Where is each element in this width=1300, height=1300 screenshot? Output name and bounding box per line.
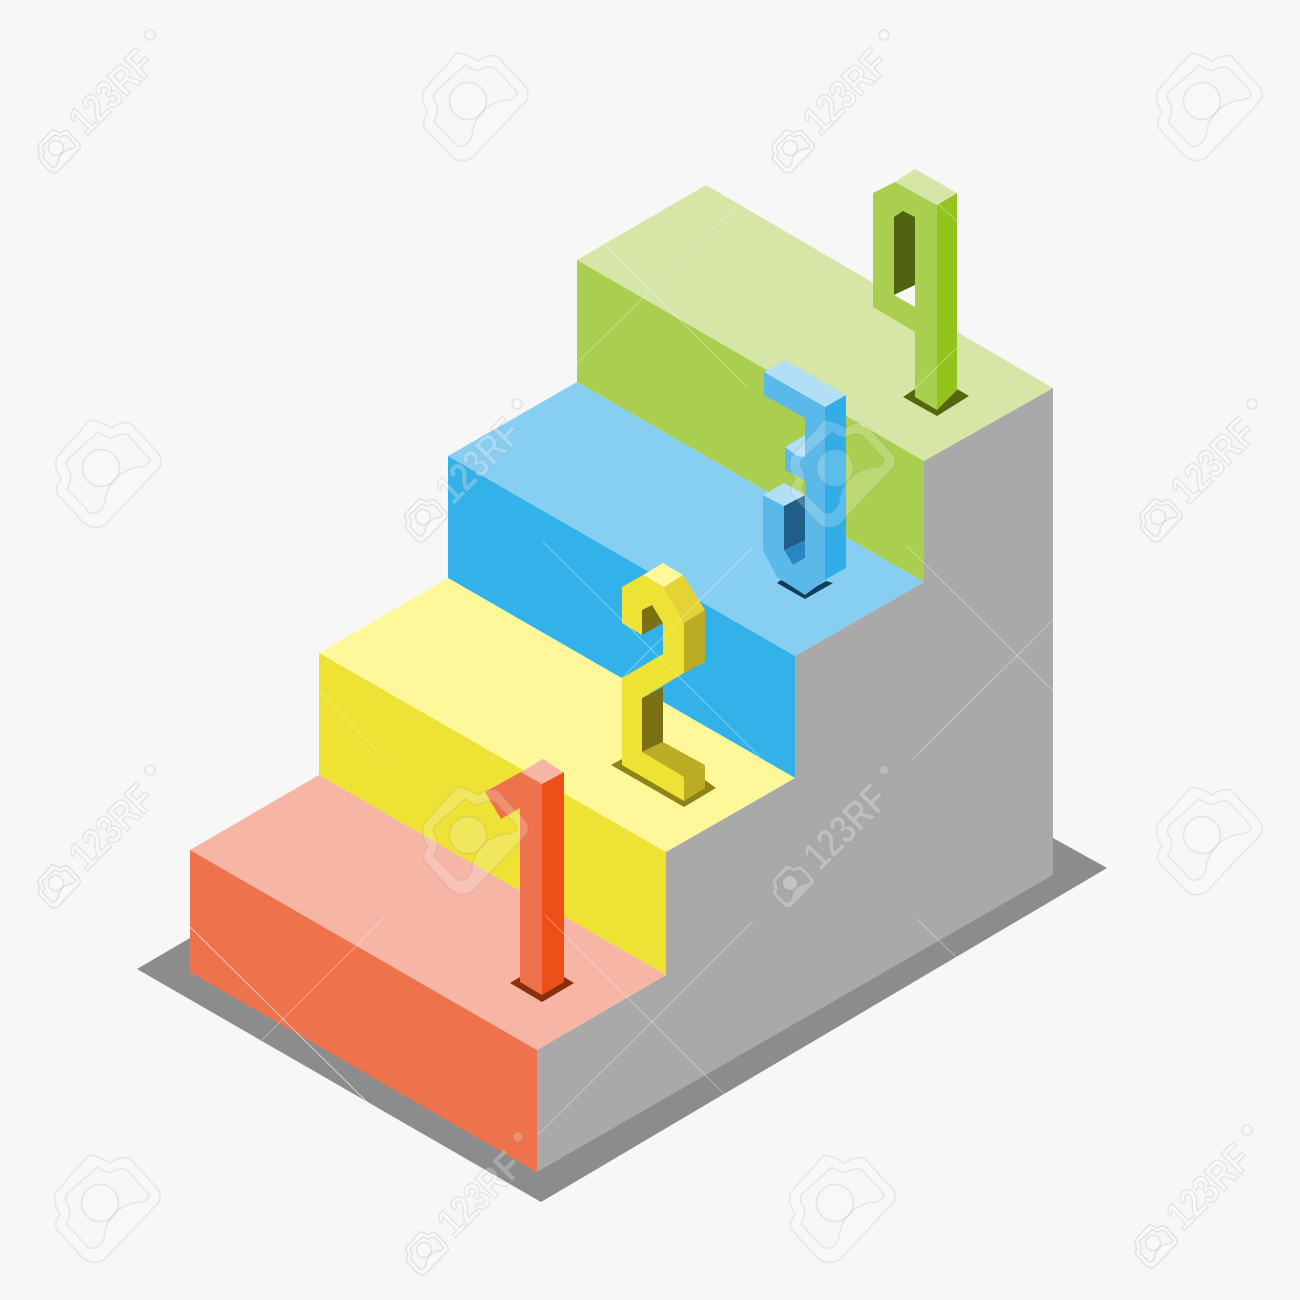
watermark stamp 6 <box>772 765 897 908</box>
watermark stamp 4 <box>1140 399 1265 542</box>
number 2 <box>611 563 716 807</box>
watermark stamp 8 <box>1135 1125 1260 1268</box>
watermark stamp 3 <box>405 399 530 542</box>
step 3: blue <box>448 382 924 778</box>
watermark stamp 7: 123RF <box>428 1142 531 1245</box>
watermark stamp 8: 123RF <box>1157 1135 1260 1238</box>
step 2: yellow <box>319 578 795 975</box>
watermark egg icon 8 <box>790 1155 895 1263</box>
ground shadow <box>137 838 1107 1202</box>
watermark stamp 7 <box>406 1132 531 1275</box>
watermark egg icon 7 <box>55 1155 160 1263</box>
watermark egg icon 1 <box>423 53 528 161</box>
watermark stamp 2 <box>772 30 897 173</box>
watermark egg icon 5 <box>423 787 528 895</box>
number 4 <box>873 169 969 416</box>
watermark stamp 2: 123RF <box>794 40 897 143</box>
watermark grid lines <box>190 203 1053 1135</box>
watermark egg icon 6 <box>1157 787 1262 895</box>
staircase grey side wall <box>537 388 1053 1172</box>
watermark egg icon 2 <box>1157 53 1262 161</box>
number 3 <box>763 360 846 599</box>
watermark stamp 6: 123RF <box>794 775 897 878</box>
watermark stamp 5 <box>38 765 163 908</box>
watermark egg icon 3 <box>56 420 161 528</box>
watermark stamp 1: 123RF <box>60 40 163 143</box>
step 4: green <box>577 185 1053 582</box>
watermark egg icon 4 <box>790 420 895 528</box>
watermark stamp 5: 123RF <box>60 775 163 878</box>
watermark stamp 4: 123RF <box>1162 409 1265 512</box>
number 1 <box>485 759 574 1002</box>
step 1: orange <box>190 775 666 1172</box>
watermark stamp 3: 123RF <box>427 409 530 512</box>
watermark stamp 1 <box>38 30 163 173</box>
